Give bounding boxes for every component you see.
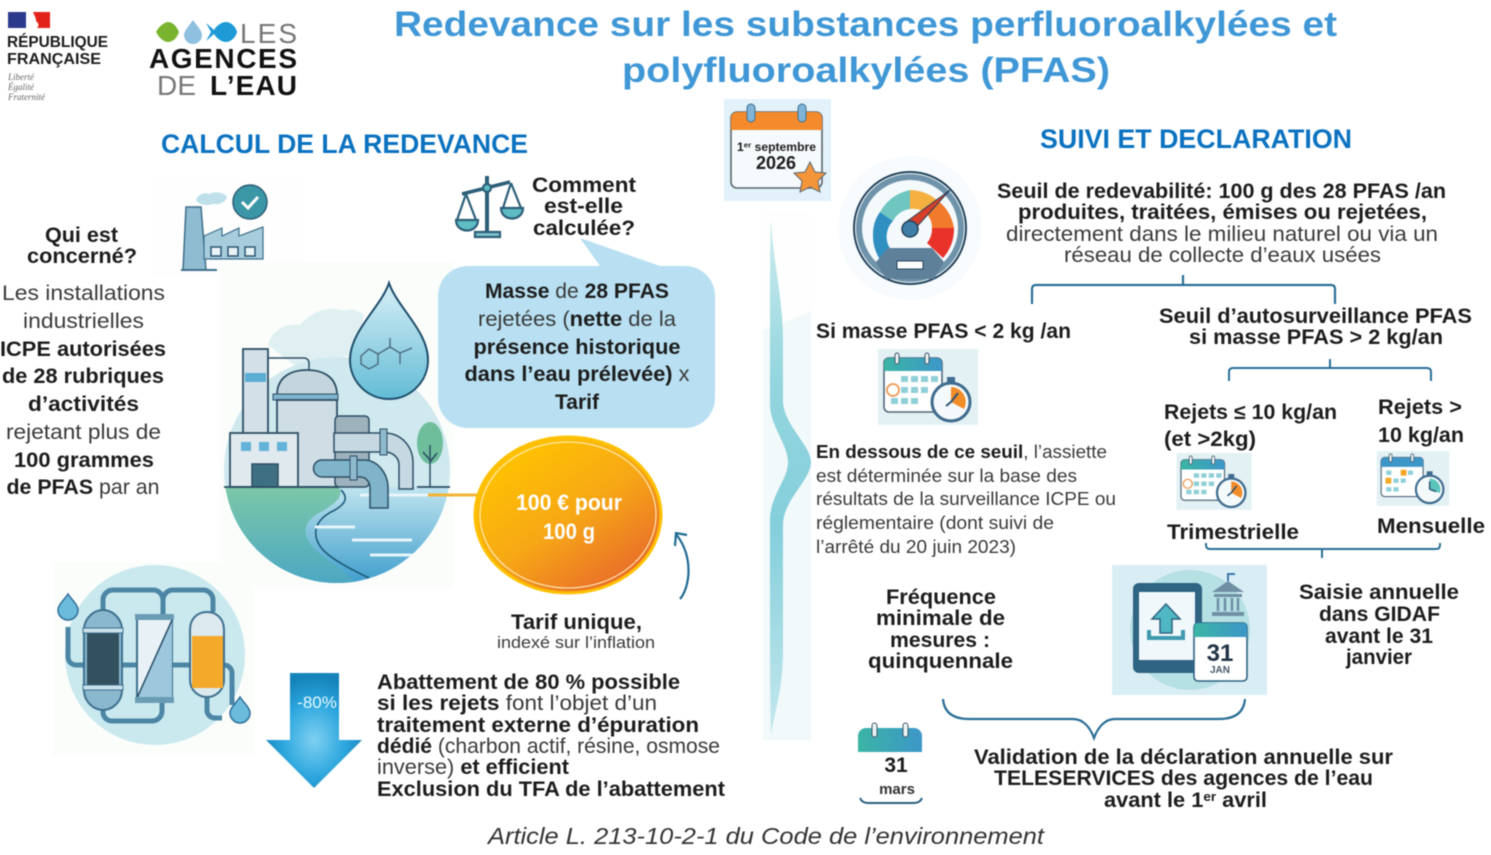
- text: fréquence minimale: minimale de: [876, 607, 1005, 630]
- icon: calendar 31 mars: [858, 723, 922, 803]
- text: rejets inférieurs: [1164, 401, 1337, 451]
- logo: Les Agences de l'eau: L’EAU: [210, 70, 297, 101]
- icon: scales: [456, 176, 523, 237]
- callout: formula: Masse de 28 PFAS: [485, 280, 669, 303]
- title: polyfluoroalkylées (PFAS): [622, 51, 1110, 90]
- tariff circle: [428, 437, 661, 593]
- text: en dessous du seuil: est déterminée sur la base des: [816, 466, 1077, 486]
- text: seuil de redevabilité: [997, 180, 1446, 267]
- text: en dessous du seuil: [816, 442, 1116, 557]
- text: installations concernées: [0, 282, 166, 499]
- logo: Les Agences de l'eau: DE: [157, 70, 196, 101]
- text: seuil de redevabilité: Seuil de redevabilité: 100 g des 28 PFAS /an: [997, 180, 1446, 203]
- icon: trimestrial calendar: [1176, 453, 1252, 510]
- text: abattement: [377, 671, 725, 801]
- text: abattement: dédié (charbon actif, résine, osmose: [377, 735, 720, 758]
- text: comment est-elle calculée: calculée?: [533, 217, 635, 240]
- arrow: -80%: -80%: [297, 693, 337, 712]
- bracket: saisie: [1206, 543, 1440, 558]
- text: qui est concerné: concerné?: [27, 245, 137, 268]
- icon: monthly calendar: [1377, 451, 1449, 506]
- icon: calendar 31 mars: mars: [879, 781, 915, 798]
- text: installations concernées: 100 grammes: [14, 449, 154, 472]
- logo: République française: Fraternité: [7, 92, 46, 102]
- text: saisie annuelle: dans GIDAF: [1319, 603, 1440, 626]
- text: saisie annuelle: Saisie annuelle: [1299, 581, 1459, 604]
- text: abattement: inverse) et efficient: [377, 756, 569, 779]
- text: qui est concerné: [27, 224, 137, 268]
- title: [394, 5, 1337, 90]
- text: fréquence minimale: [868, 586, 1013, 673]
- brace: validation: [943, 699, 1245, 738]
- icon: calendar 1er septembre 2026: er: [744, 140, 751, 150]
- text: validation de la déclaration: [974, 746, 1393, 812]
- icon: tablet upload and calendar: JAN: [1210, 665, 1230, 676]
- arrow: -80%: [266, 673, 362, 788]
- logo: République française: Liberté: [7, 72, 35, 82]
- text: installations concernées: d’activités: [28, 393, 139, 416]
- text: tarif unique: Tarif unique,: [511, 611, 642, 634]
- logo: Les Agences de l'eau: LES: [240, 18, 297, 49]
- icon: calendar 31 mars: 31: [884, 754, 908, 777]
- text: saisie annuelle: avant le 31: [1325, 625, 1433, 648]
- heading: suivi et déclaration: SUIVI ET DECLARATION: [1040, 124, 1352, 154]
- logo: Les Agences de l'eau: [149, 18, 297, 101]
- text: validation de la déclaration: avant le 1: [1104, 789, 1200, 812]
- text: fréquence minimale: quinquennale: [868, 650, 1013, 673]
- icon: tablet upload and calendar: [1112, 565, 1267, 695]
- text: si masse inférieure: Si masse PFAS < 2 kg /an: [816, 320, 1071, 343]
- text: installations concernées: rejetant plus de: [6, 421, 161, 444]
- text: en dessous du seuil: réglementaire (dont suivi de: [816, 513, 1054, 533]
- text: rejets supérieurs: [1378, 396, 1464, 447]
- text: tarif unique: indexé sur l’inflation: [497, 633, 655, 652]
- text: en dessous du seuil: résultats de la surveillance ICPE ou: [816, 489, 1116, 509]
- text: tarif unique: [497, 611, 655, 652]
- text: installations concernées: industrielles: [23, 310, 144, 333]
- text: abattement: Exclusion du TFA de l’abattement: [377, 778, 725, 801]
- icon: calendar 1er septembre 2026: 1: [737, 142, 743, 154]
- text: en dessous du seuil: En dessous de ce seuil , l’assiette: [816, 442, 1107, 462]
- icon: factory with check: [152, 178, 305, 276]
- text: seuil de redevabilité: produites, traitées, émises ou rejetées,: [1018, 201, 1427, 224]
- text: installations concernées: ICPE autorisées: [0, 338, 166, 361]
- arrow: indexation: [675, 533, 688, 599]
- text: rejets inférieurs: Rejets ≤ 10 kg/an: [1164, 401, 1337, 424]
- text: seuil de redevabilité: réseau de collecte d’eaux usées: [1064, 244, 1381, 267]
- logo: République française: RÉPUBLIQUE: [7, 32, 108, 51]
- text: abattement: Abattement de 80 % possible: [377, 671, 680, 694]
- text: en dessous du seuil: l’arrêté du 20 juin 2023): [816, 537, 1016, 557]
- bracket: rejets split: [1229, 359, 1431, 381]
- illustration: treatment filters: [53, 562, 254, 755]
- callout: formula: présence historique: [474, 336, 680, 359]
- icon: water drop with molecule: [350, 283, 428, 399]
- text: abattement: traitement externe d’épuration: [377, 714, 699, 737]
- title: Redevance sur les substances perfluoroalkylées et: [394, 5, 1337, 44]
- bracket: seuil split: [1032, 275, 1335, 304]
- icon: calendar stopwatch: [878, 349, 978, 425]
- text: seuil de redevabilité: directement dans le milieu naturel ou via un: [1006, 223, 1438, 246]
- callout: formula: rejetées (nette de la: [478, 308, 676, 331]
- text: saisie annuelle: [1299, 581, 1459, 669]
- label: mensuelle: Mensuelle: [1377, 515, 1485, 538]
- icon: calendar 1er septembre 2026: 2026: [756, 153, 796, 173]
- text: installations concernées: de PFAS par an: [6, 476, 160, 499]
- central ribbon: [763, 212, 811, 740]
- callout: formula: Tarif: [555, 391, 600, 414]
- logo: République française: [7, 12, 108, 102]
- logo: République française: FRANÇAISE: [7, 51, 101, 68]
- icon: speedometer: [838, 156, 982, 300]
- text: validation de la déclaration: Validation de la déclaration annuelle sur: [974, 746, 1393, 769]
- text: abattement: si les rejets font l’objet d’un: [377, 692, 657, 715]
- text: validation de la déclaration: TELESERVICES des agences de l’eau: [994, 767, 1373, 790]
- text: installations concernées: Les installations: [2, 282, 165, 305]
- text: seuil d'autosurveillance: [1159, 305, 1472, 349]
- text: validation de la déclaration: avril: [1216, 789, 1267, 812]
- text: qui est concerné: Qui est: [45, 224, 118, 247]
- text: installations concernées: de 28 rubriques: [2, 365, 164, 388]
- text: comment est-elle calculée: [532, 174, 636, 240]
- label: trimestrielle: Trimestrielle: [1167, 521, 1299, 544]
- text: comment est-elle calculée: est-elle: [544, 195, 623, 218]
- icon: calendar 1er septembre 2026: septembre: [751, 142, 816, 154]
- text: rejets inférieurs: (et >2kg): [1164, 428, 1256, 451]
- icon: tablet upload and calendar: 31: [1207, 640, 1233, 667]
- text: seuil d'autosurveillance: si masse PFAS > 2 kg/an: [1189, 326, 1443, 349]
- text: validation de la déclaration: er: [1203, 789, 1216, 804]
- text: rejets supérieurs: Rejets >: [1378, 396, 1462, 419]
- text: rejets supérieurs: 10 kg/an: [1378, 424, 1464, 447]
- text: seuil d'autosurveillance: Seuil d’autosurveillance PFAS: [1159, 305, 1472, 328]
- logo: République française: Égalité: [7, 82, 35, 92]
- footer: article de loi: Article L. 213-10-2-1 du Code de l’environnement: [486, 823, 1046, 849]
- text: saisie annuelle: janvier: [1345, 646, 1412, 669]
- tariff circle: 100 g: [543, 519, 595, 544]
- callout: formula: [438, 238, 715, 428]
- heading: calcul de la redevance: CALCUL DE LA REDEVANCE: [161, 129, 528, 159]
- text: fréquence minimale: mesures :: [890, 629, 990, 652]
- icon: calendar 1er septembre 2026: [724, 99, 831, 201]
- icon: outlet drop: [230, 697, 250, 723]
- icon: inlet drop: [58, 594, 78, 620]
- tariff circle: 100 € pour: [516, 490, 622, 515]
- callout: formula: dans l’eau prélevée) x: [464, 363, 690, 386]
- logo: Les Agences de l'eau: AGENCES: [149, 43, 297, 74]
- illustration: factory discharging into water: [220, 262, 453, 588]
- text: comment est-elle calculée: Comment: [532, 174, 636, 197]
- text: fréquence minimale: Fréquence: [886, 586, 996, 609]
